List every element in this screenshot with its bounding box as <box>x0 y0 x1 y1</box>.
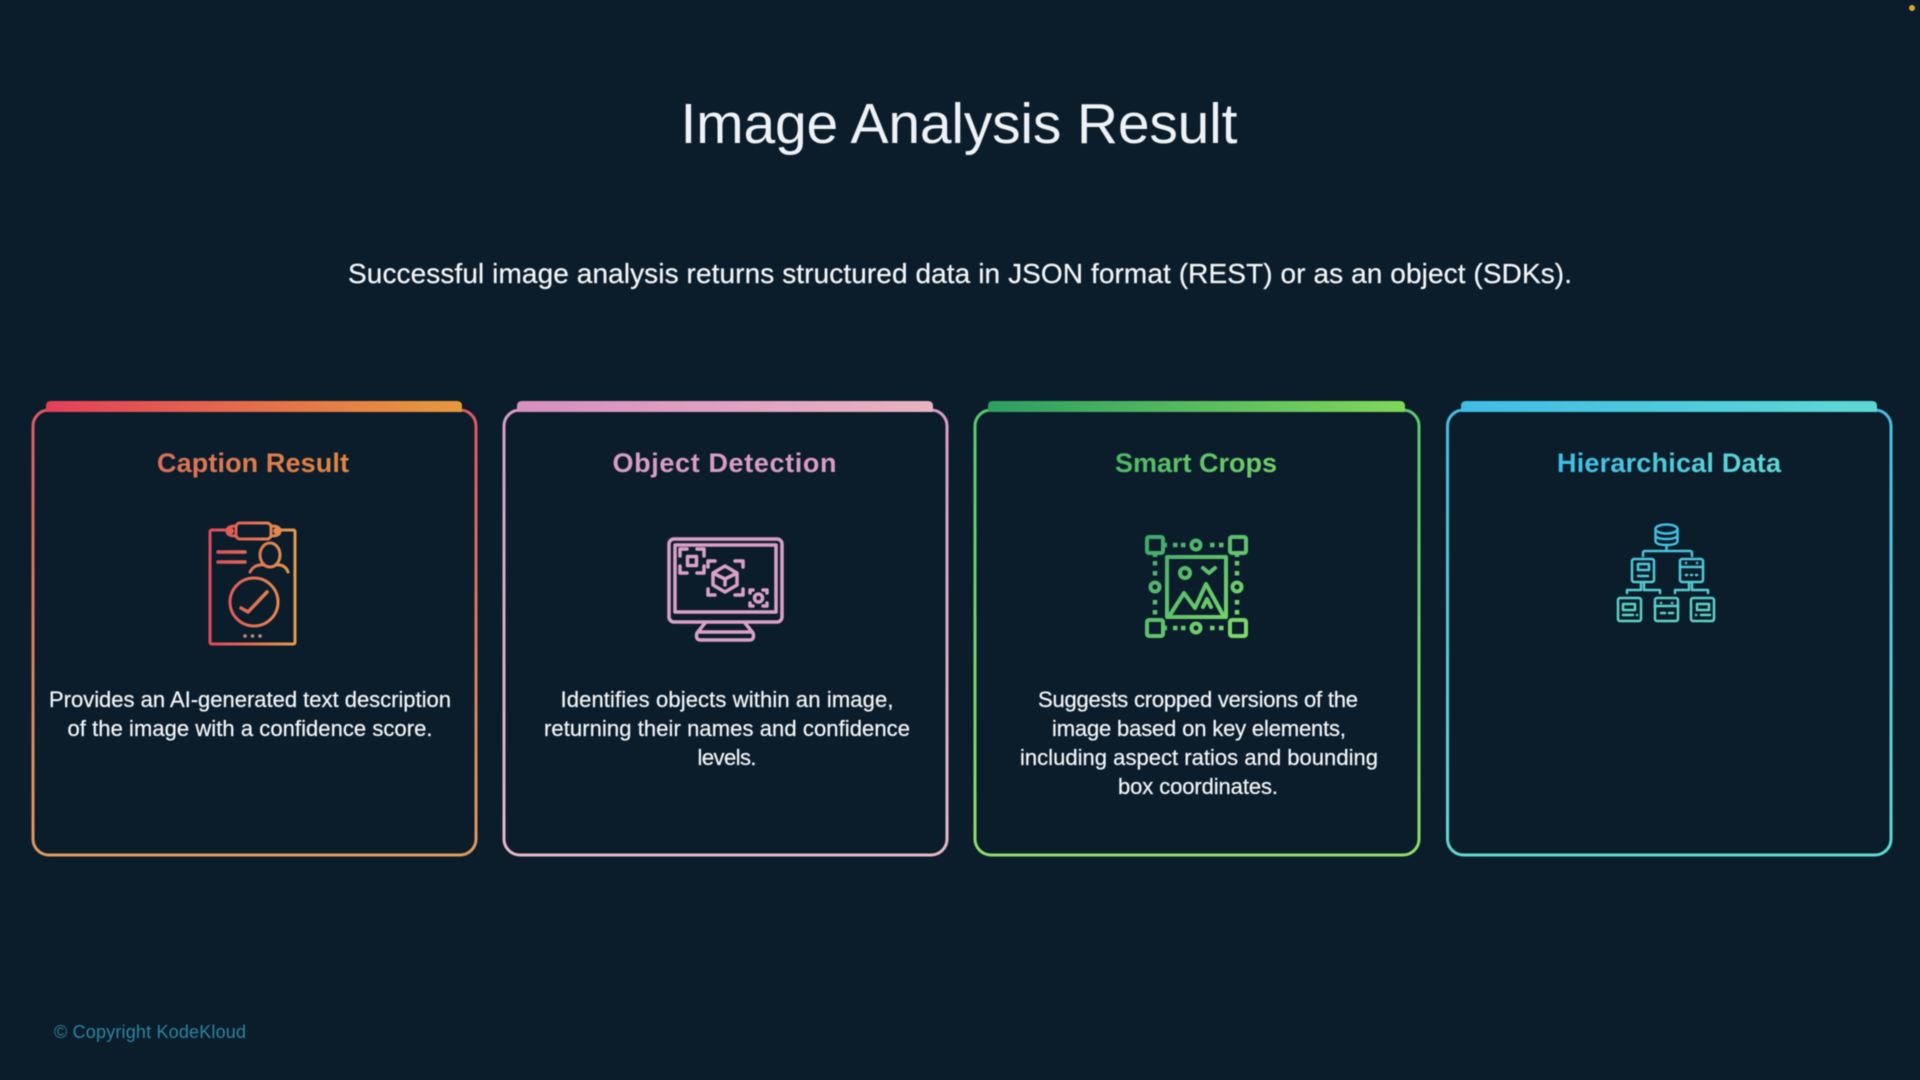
card top edge <box>988 408 1405 412</box>
card border <box>1448 410 1891 855</box>
card heading: Caption Result <box>157 448 349 478</box>
card top edge <box>1461 408 1877 412</box>
card border <box>504 410 947 855</box>
card description <box>49 687 451 741</box>
footer copyright: © Copyright KodeKloud <box>54 1022 246 1042</box>
card description: Suggests cropped versions of the <box>1038 687 1358 712</box>
card description: image based on key elements, <box>1052 716 1346 741</box>
card border <box>33 410 476 855</box>
card heading: Hierarchical Data <box>1557 448 1782 478</box>
card top bar <box>1461 401 1877 412</box>
card heading: Object Detection <box>612 448 836 478</box>
card description <box>544 687 910 770</box>
card description: levels. <box>698 745 756 770</box>
card top bar <box>517 401 933 412</box>
card description: Provides an AI-generated text description <box>49 687 451 712</box>
card border <box>975 410 1419 855</box>
title: Image Analysis Result <box>680 92 1238 156</box>
amber status dot <box>1909 5 1915 11</box>
panel: smart crops <box>975 401 1419 855</box>
card description: returning their names and confidence <box>544 716 910 741</box>
subtitle: Successful image analysis returns structured data in JSON format (REST) or as an object (SDKs). <box>348 258 1572 289</box>
icon: image crop frame <box>1147 537 1246 636</box>
card top edge <box>46 408 462 412</box>
card description <box>1020 687 1378 799</box>
card top bar <box>988 401 1405 412</box>
card description: of the image with a confidence score. <box>68 716 432 741</box>
card top edge <box>517 408 933 412</box>
icon: monitor with detection targets <box>669 539 782 640</box>
card heading: Smart Crops <box>1115 448 1277 478</box>
panel: hierarchical data <box>1448 401 1891 855</box>
panel: object detection <box>504 401 947 855</box>
card description: including aspect ratios and bounding <box>1020 745 1378 770</box>
icon: clipboard with check <box>210 523 295 644</box>
card top bar <box>46 401 462 412</box>
card description: Identifies objects within an image, <box>560 687 894 712</box>
panel: caption result <box>33 401 476 855</box>
card description: box coordinates. <box>1118 774 1278 799</box>
icon: database hierarchy <box>1618 524 1714 621</box>
